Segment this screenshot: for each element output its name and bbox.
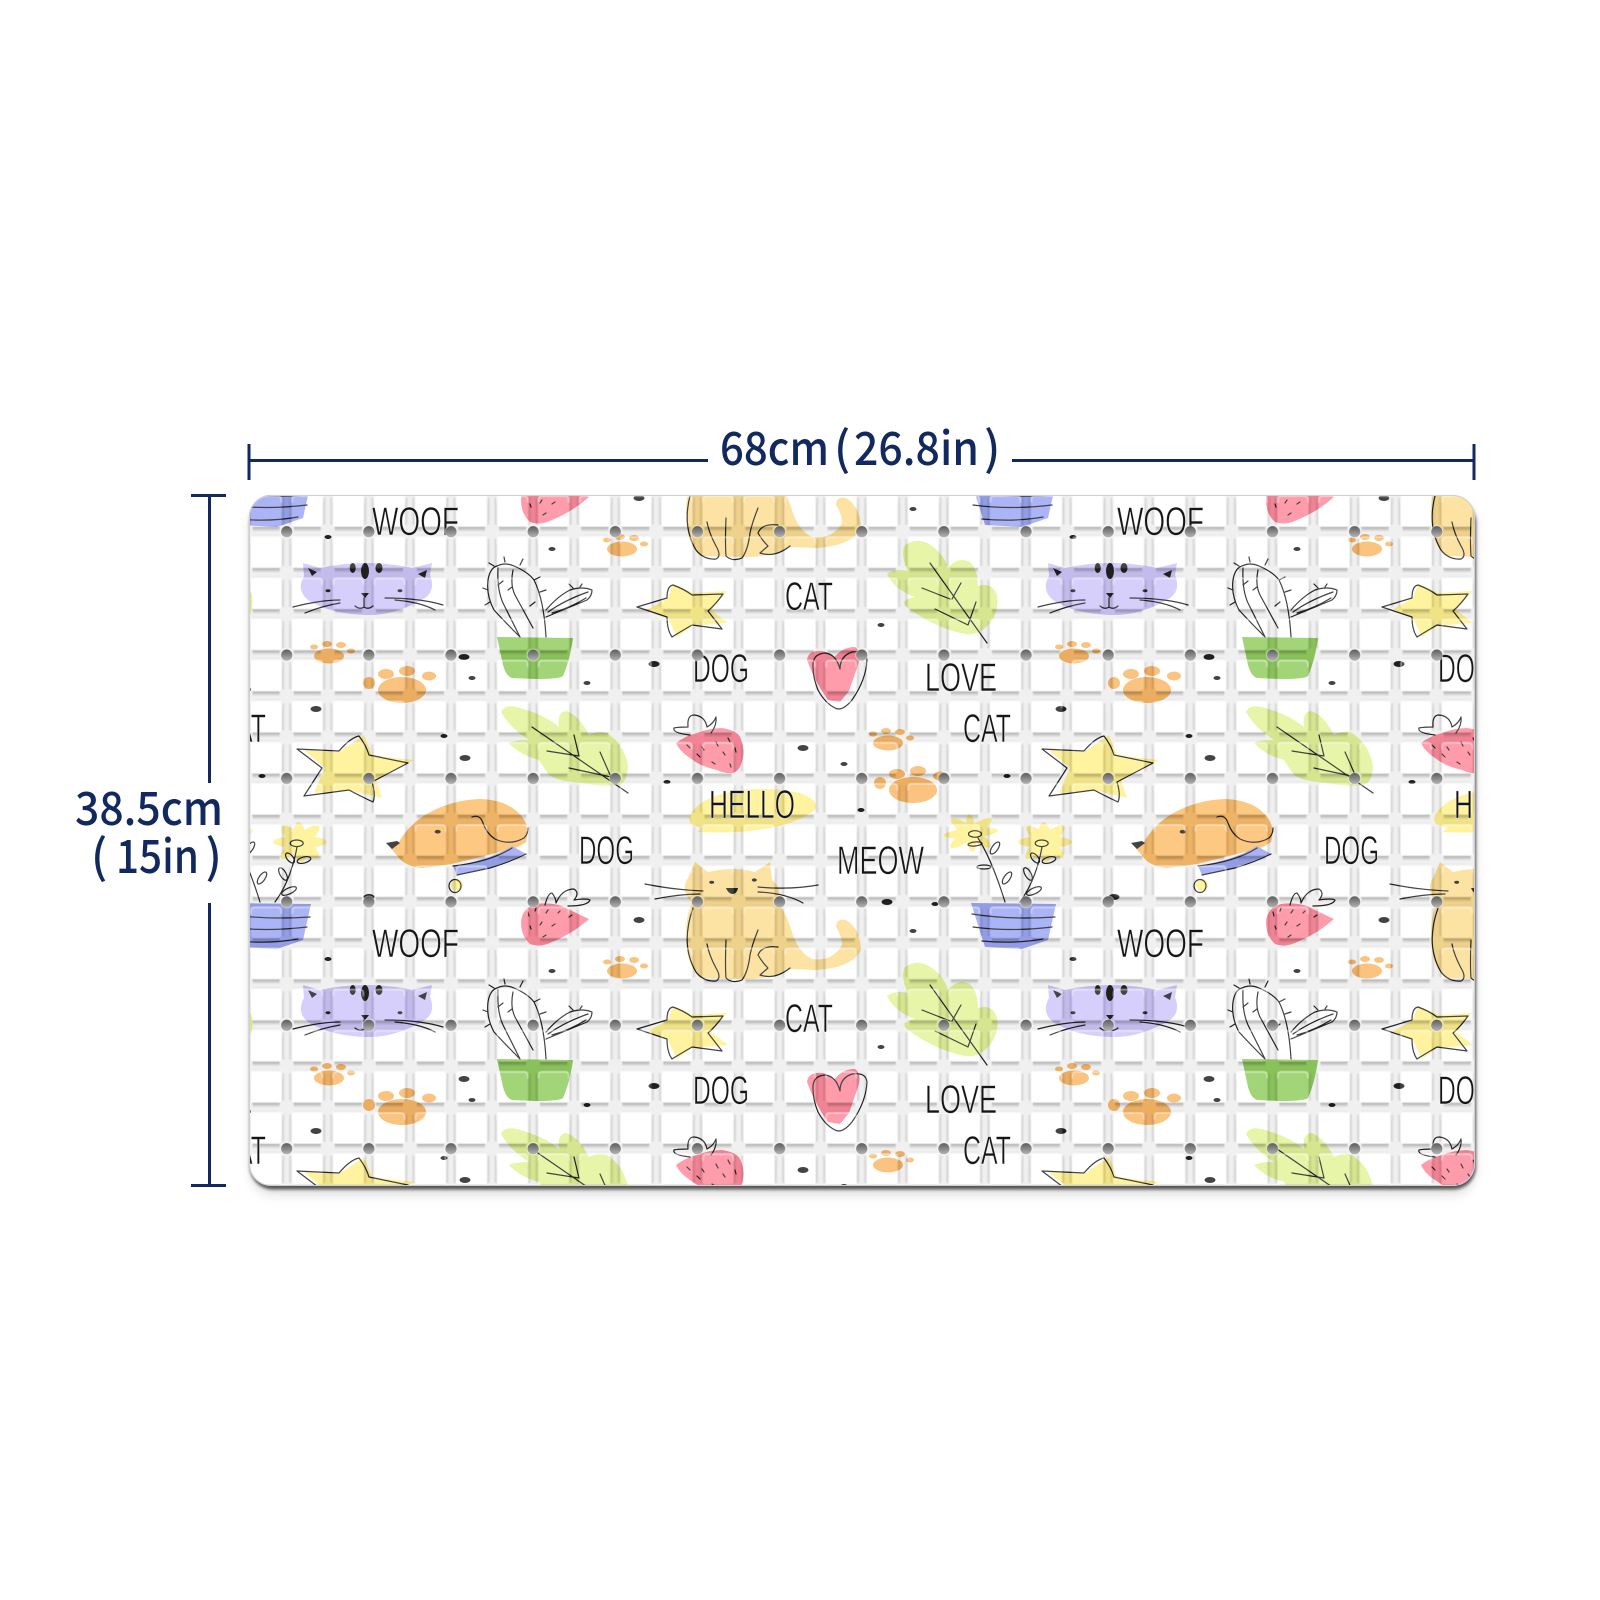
- illustration: potted flowers: [199, 392, 1072, 949]
- printed words: WOOF: [372, 500, 459, 544]
- printed words: MEOW: [837, 839, 924, 883]
- height label: [75, 773, 223, 887]
- printed words: CAT: [963, 1129, 1011, 1173]
- illustration: yellow blobs behind HELLO: [689, 789, 1561, 832]
- illustration: stars, second kind: [297, 735, 1159, 1224]
- width label: ): [984, 413, 1000, 479]
- printed words: WOOF: [1117, 922, 1204, 966]
- illustration: strawberries, first kind: [674, 715, 1489, 1195]
- printed words: DOG: [1438, 647, 1494, 691]
- height label: 15in: [116, 821, 199, 887]
- mat shadow: [250, 500, 1476, 1196]
- height label: ): [206, 821, 222, 887]
- illustration: dogs with collars: [386, 799, 1273, 892]
- printed words: [250, 506, 1474, 1164]
- mat base: [249, 495, 1475, 1186]
- printed words: CAT: [785, 575, 833, 619]
- printed words: CAT: [785, 997, 833, 1041]
- width label: [720, 413, 1000, 479]
- illustration: stars, first kind: [637, 584, 1473, 1059]
- printed words: WOOF: [372, 922, 459, 966]
- printed words: DOG: [579, 829, 634, 873]
- illustration: sitting cats: [645, 440, 1600, 982]
- printed words: DOG: [693, 1069, 749, 1113]
- printed words: CAT: [218, 1129, 266, 1173]
- illustration: hearts: [807, 647, 867, 1131]
- height label: 38.5cm: [75, 773, 223, 839]
- width label: (: [834, 413, 850, 479]
- width dimension line: [249, 444, 1474, 480]
- height dimension line: [191, 496, 226, 1186]
- mat grid of raised squares: [249, 495, 1475, 1186]
- illustration: cat faces: [293, 563, 1188, 1037]
- width label: 26.8in: [854, 413, 979, 479]
- mat outline: [250, 496, 1474, 1186]
- illustration: paw prints: [310, 534, 1393, 1172]
- illustration: potted cactus: [483, 557, 1337, 1101]
- illustration: strawberries, second kind: [521, 467, 1335, 946]
- printed words: LOVE: [180, 1078, 252, 1122]
- printed words: DOG: [1438, 1069, 1494, 1113]
- printed words: CAT: [218, 707, 266, 751]
- width label: 68cm: [720, 413, 829, 479]
- printed words: DOG: [693, 647, 749, 691]
- printed words: HELLO: [709, 783, 795, 827]
- printed words: HELLO: [1454, 783, 1540, 827]
- printed words: LOVE: [925, 1078, 997, 1122]
- scattered dots: [250, 495, 1474, 1186]
- printed words: LOVE: [180, 656, 252, 700]
- drain holes: [280, 525, 1444, 1156]
- height label: (: [91, 821, 107, 887]
- printed words: CAT: [963, 707, 1011, 751]
- printed words: DOG: [1324, 829, 1379, 873]
- printed words: WOOF: [1117, 500, 1204, 544]
- printed words: LOVE: [925, 656, 997, 700]
- illustration: leaves, second kind: [501, 706, 1373, 1215]
- illustration: leaves, first kind: [142, 541, 998, 1065]
- bath mat: [249, 495, 1475, 1186]
